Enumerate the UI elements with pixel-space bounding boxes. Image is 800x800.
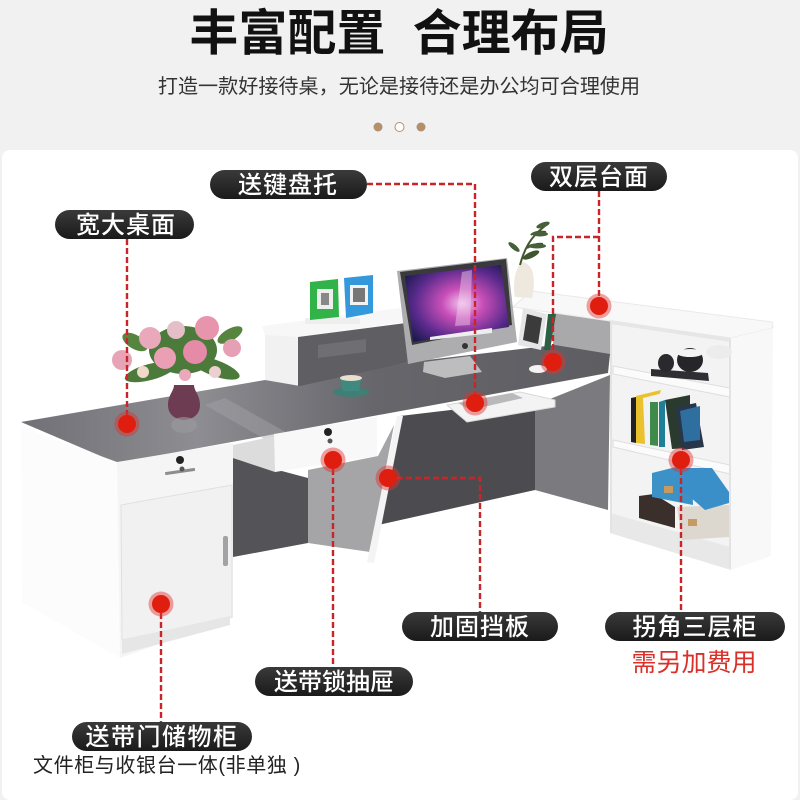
bottom note: 文件柜与收银台一体(非单独 ) xyxy=(33,754,301,777)
subtitle: 打造一款好接待桌，无论是接待还是办公均可合理使用 xyxy=(158,75,640,98)
cups on top shelf xyxy=(651,345,732,381)
title: 丰富配置 合理布局 xyxy=(189,7,609,61)
left pedestal side xyxy=(21,427,120,658)
left pedestal front xyxy=(117,443,233,658)
callout: 拐角三层柜 xyxy=(605,448,785,641)
right raised counter back xyxy=(553,312,611,356)
callout: 送带锁抽屉: 送带锁抽屉 xyxy=(274,669,394,696)
QR code stands xyxy=(305,275,373,324)
drawer under desk xyxy=(233,417,377,472)
desktop surface xyxy=(21,345,610,463)
callout: 送键盘托 xyxy=(210,170,488,416)
flower vase xyxy=(112,316,245,433)
callout: 宽大桌面 xyxy=(55,210,194,436)
framed picture and books xyxy=(518,308,556,350)
callout: 拐角三层柜: 拐角三层柜 xyxy=(632,614,758,641)
extra cost note: 需另加费用 xyxy=(631,649,757,677)
right grey panel xyxy=(535,375,610,510)
callout: 送键盘托: 送键盘托 xyxy=(238,172,338,199)
monitor xyxy=(397,258,517,378)
callout: 宽大桌面: 宽大桌面 xyxy=(76,212,176,239)
callout: 送带锁抽屉 xyxy=(255,448,413,696)
books on middle shelf xyxy=(631,390,704,450)
callout: 双层台面 xyxy=(531,162,667,374)
centre back dark panel xyxy=(233,458,308,557)
callout: 加固挡板 xyxy=(376,466,558,641)
callout: 送带门储物柜: 送带门储物柜 xyxy=(86,724,238,751)
corner three-layer cabinet xyxy=(610,320,773,570)
keyboard tray xyxy=(447,392,555,422)
inner grey support xyxy=(308,425,394,552)
storage boxes on bottom shelf xyxy=(639,466,729,540)
decorative plant vase xyxy=(507,220,550,298)
reception desk illustration xyxy=(21,220,773,658)
left raised hutch xyxy=(262,308,410,388)
callout: 双层台面: 双层台面 xyxy=(549,164,649,191)
mouse xyxy=(529,365,547,373)
cup and saucer xyxy=(333,375,369,397)
slanted white baffle edge xyxy=(367,416,403,563)
carousel dots xyxy=(374,122,426,132)
desktop highlights xyxy=(205,398,300,445)
callout: 加固挡板: 加固挡板 xyxy=(430,614,530,641)
corner cabinet top xyxy=(513,291,773,338)
back dark panel xyxy=(378,400,535,525)
callout: 送带门储物柜 xyxy=(72,592,252,751)
